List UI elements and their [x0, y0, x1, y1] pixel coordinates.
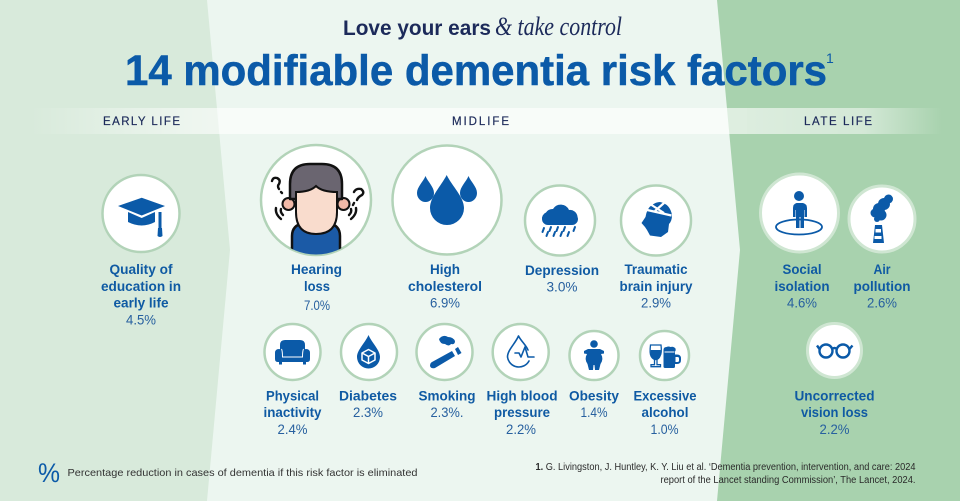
factor: quality of education — [101, 175, 181, 328]
icon: three drops — [417, 175, 477, 225]
factor: high cholesterol: cholesterol — [408, 278, 482, 294]
factor: social isolation: Social — [782, 261, 822, 277]
factor: traumatic brain injury: Traumatic — [624, 261, 688, 277]
factor: high cholesterol: High — [430, 261, 460, 277]
factor: hearing loss: loss — [304, 278, 330, 294]
factor: hearing loss — [261, 145, 371, 313]
factor: physical inactivity — [264, 324, 322, 437]
icon: sofa — [275, 340, 310, 364]
factor: excessive alcohol — [634, 331, 697, 437]
heading: midlife: MIDLIFE — [452, 116, 509, 128]
factor: physical inactivity: inactivity — [264, 404, 322, 420]
title: tagline: Love your ears — [343, 16, 491, 40]
footnote: reference: 1. G. Livingston, J. Huntley, K. Y. Liu et al. ‘Dementia prevention, intervention, and care: 2024 — [536, 462, 916, 473]
icon: rain cloud — [542, 205, 578, 236]
factor: physical inactivity: 2.4% — [278, 421, 308, 437]
icon: person in circle — [776, 191, 822, 234]
legend: percentage explanation: Percentage reduction in cases of dementia if this risk factor is eliminated — [68, 467, 418, 479]
factor: smoking: Smoking — [418, 388, 476, 404]
factor: quality of education: early life — [114, 294, 169, 310]
factor: obesity: Obesity — [569, 388, 619, 404]
factor: obesity: 1.4% — [580, 404, 608, 420]
factor: depression — [525, 186, 599, 294]
factor: hearing loss: 7.0% — [304, 297, 330, 313]
factor: traumatic brain injury: 2.9% — [641, 294, 671, 310]
icon: drop with sugar cube — [357, 335, 380, 369]
factor: air pollution — [849, 186, 915, 310]
panel: midlife background — [207, 0, 740, 501]
factor: diabetes: Diabetes — [339, 388, 397, 404]
factor: excessive alcohol: alcohol — [642, 404, 688, 420]
factor: high blood pressure: 2.2% — [506, 421, 536, 437]
factor: excessive alcohol: 1.0% — [650, 421, 678, 437]
factor: depression: Depression — [525, 262, 599, 278]
panel: late life background — [710, 0, 960, 501]
factor: social isolation: 4.6% — [787, 294, 817, 310]
factor: quality of education: Quality of — [110, 261, 173, 277]
factor: uncorrected vision loss: 2.2% — [820, 421, 850, 437]
factor: social isolation: isolation — [774, 278, 830, 294]
factor: physical inactivity: Physical — [266, 388, 319, 404]
factor: quality of education: education in — [101, 278, 181, 294]
factor: uncorrected vision loss: Uncorrected — [794, 388, 874, 404]
factor: quality of education: 4.5% — [126, 312, 156, 328]
factor: air pollution: 2.6% — [867, 294, 897, 310]
factor: depression: 3.0% — [546, 278, 578, 294]
legend: percentage explanation: % — [38, 458, 60, 488]
factor: high blood pressure: High blood — [486, 388, 558, 404]
icon: graduation cap — [118, 198, 165, 237]
footnote: reference — [536, 462, 916, 486]
factor: obesity — [569, 331, 619, 420]
footnote: reference: report of the Lancet standing Commission’, The Lancet, 2024. — [660, 475, 916, 486]
icon: large person — [584, 340, 604, 370]
factor: hearing loss: Hearing — [291, 261, 342, 277]
icon: bandaged head — [642, 202, 672, 237]
icon: wine glass and beer mug — [650, 345, 681, 368]
icon: smoking chimney — [870, 194, 893, 243]
legend: percentage explanation — [38, 458, 418, 488]
factor: high cholesterol: 6.9% — [430, 294, 460, 310]
factor: traumatic brain injury — [620, 186, 693, 310]
factor: high blood pressure: pressure — [494, 404, 550, 420]
factor: smoking: 2.3%. — [430, 404, 464, 420]
factor: high blood pressure — [486, 324, 558, 437]
panel: early life background — [0, 0, 240, 501]
title: tagline — [343, 12, 622, 41]
band: life stage strip — [30, 108, 942, 134]
factor: smoking — [416, 324, 476, 420]
factor: diabetes — [339, 324, 397, 420]
heading: late life: LATE LIFE — [804, 116, 872, 128]
heading: early life: EARLY LIFE — [103, 116, 180, 128]
factor: diabetes: 2.3% — [353, 404, 383, 420]
title: main heading: 14 modifiable dementia risk factors — [125, 47, 827, 95]
factor: air pollution: Air — [874, 261, 891, 277]
factor: traumatic brain injury: brain injury — [620, 278, 693, 294]
icon: cigarette — [430, 336, 462, 368]
icon: glasses — [817, 344, 852, 358]
factor: excessive alcohol: Excessive — [634, 388, 697, 404]
icon: confused person — [282, 164, 350, 260]
factor: uncorrected vision loss: vision loss — [801, 404, 868, 420]
factor: high cholesterol — [392, 146, 502, 310]
factor: social isolation — [760, 174, 838, 310]
title: tagline: & take control — [495, 12, 622, 41]
title: main heading: 1 — [826, 50, 834, 66]
factor: uncorrected vision loss — [794, 324, 874, 437]
factor: air pollution: pollution — [854, 278, 910, 294]
icon: drop with pulse — [508, 336, 534, 367]
